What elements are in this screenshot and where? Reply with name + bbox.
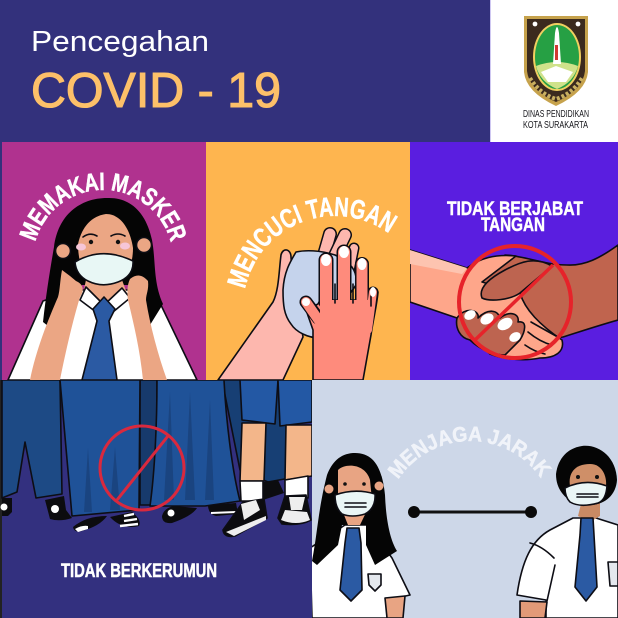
right arm and fist xyxy=(127,275,167,380)
panel: mencuci tangan xyxy=(206,142,410,380)
mask xyxy=(75,254,133,285)
curved label: memakai masker: MEMAKAI MASKER xyxy=(19,172,186,243)
illustration: boy student xyxy=(517,446,618,618)
label: tidak berjabat: TIDAK BERJABAT xyxy=(447,199,583,220)
curved label: menjaga jarak: MENJAGA JARAK xyxy=(387,426,552,479)
panel: tidak berjabat tangan xyxy=(410,142,618,380)
panel: header xyxy=(0,0,490,142)
label: tidak berkerumun: TIDAK BERKERUMUN xyxy=(61,561,217,582)
illustration: distance line xyxy=(408,506,537,518)
text: Dinas Pendidikan: DINAS PENDIDIKAN xyxy=(523,109,589,120)
shoes xyxy=(0,480,284,532)
heading: COVID - 19: COVID - 19 xyxy=(31,64,281,118)
illustration: crowd of legs xyxy=(0,380,312,618)
panel: menjaga jarak xyxy=(312,380,618,618)
panel: memakai masker xyxy=(2,142,206,380)
curved label: mencuci tangan: MENCUCI TANGAN xyxy=(227,197,398,288)
icon: city shield xyxy=(524,16,588,106)
illustration: girl student xyxy=(310,453,410,618)
prohibition sign xyxy=(100,426,184,510)
tie xyxy=(82,297,117,380)
label: tangan: TANGAN xyxy=(481,215,545,236)
illustration: handshake xyxy=(410,245,618,360)
illustration: girl wearing mask xyxy=(8,198,197,380)
text: Kota Surakarta: KOTA SURAKARTA xyxy=(523,120,588,131)
heading: Pencegahan: Pencegahan xyxy=(31,26,209,58)
prohibition sign xyxy=(459,246,571,358)
panel: logo xyxy=(490,0,618,142)
left arm and fist xyxy=(30,270,83,380)
illustration: washing hands xyxy=(218,234,378,380)
panel: tidak berkerumun xyxy=(0,380,312,618)
